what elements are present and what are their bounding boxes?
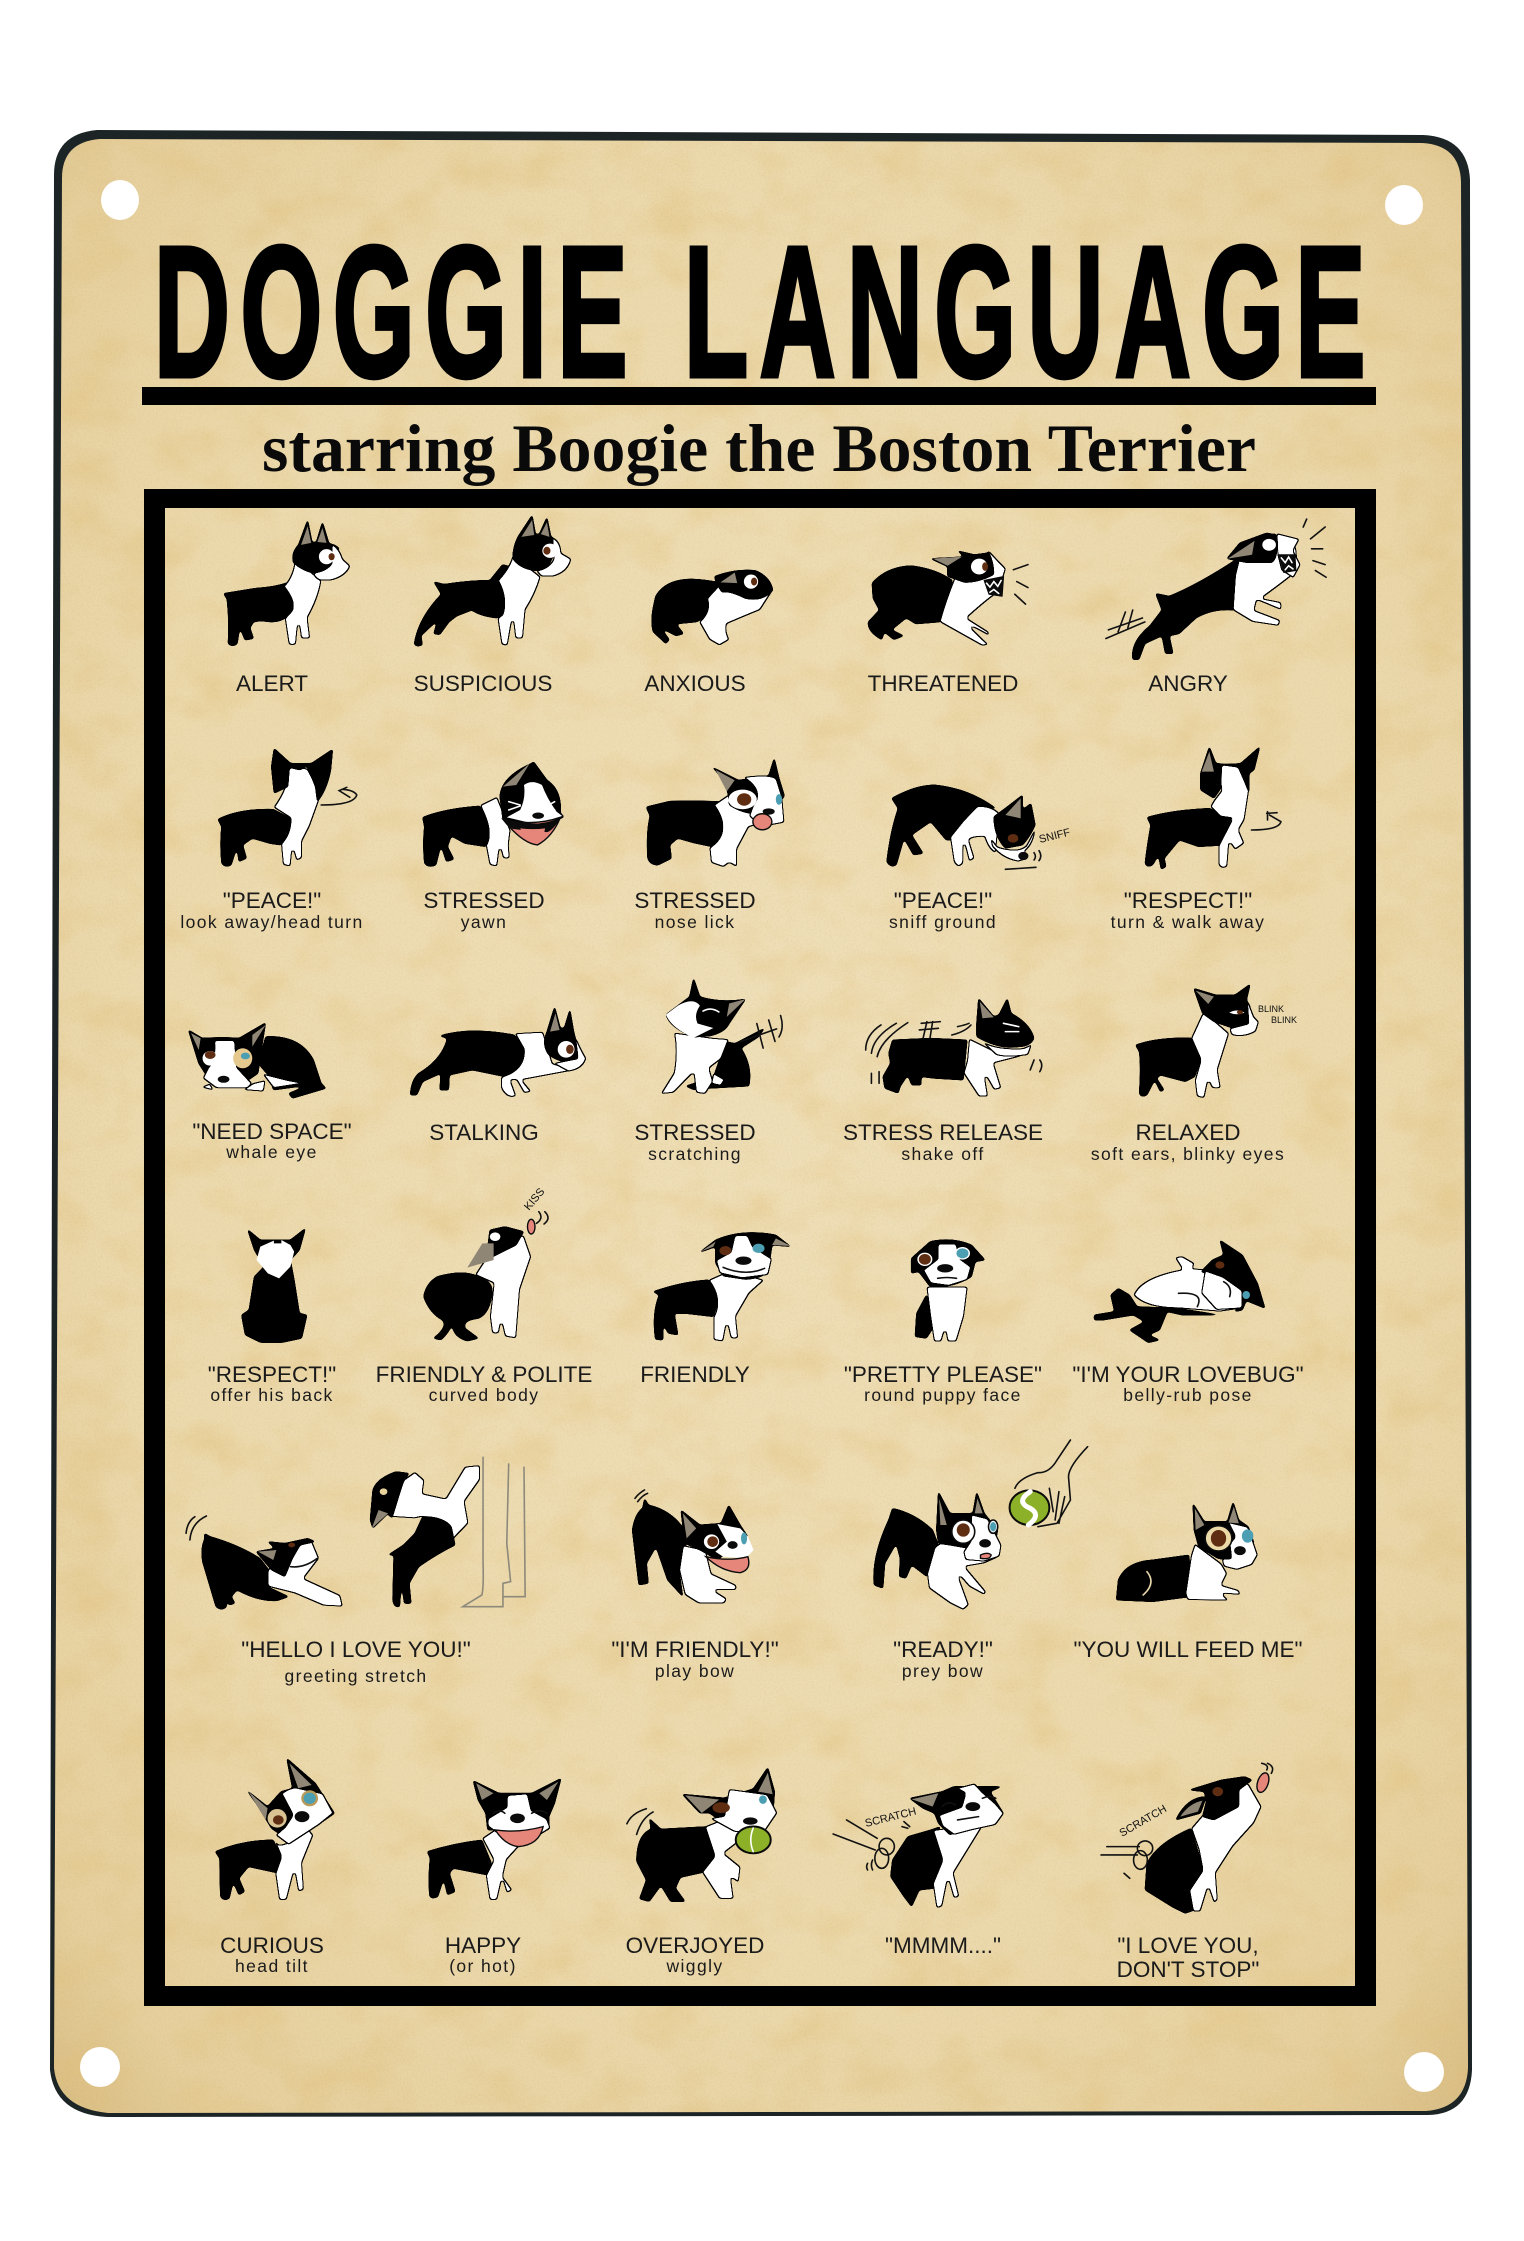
label: overjoyed: wiggly: [665, 1956, 724, 1976]
label: relaxed: [1091, 1120, 1285, 1164]
annotation: sniff: SNIFF: [1038, 827, 1072, 846]
label: stress release: STRESS RELEASE: [843, 1120, 1043, 1145]
label: stalking: STALKING: [429, 1120, 539, 1145]
label: mmmm: "MMMM....": [885, 1933, 1001, 1958]
dog: pretty please: [911, 1240, 985, 1342]
label: overjoyed: [626, 1933, 764, 1976]
label: i'm friendly: [611, 1637, 779, 1681]
label: threatened: THREATENED: [868, 671, 1018, 696]
label: need space: whale eye: [225, 1142, 318, 1162]
dog: stressed yawn: [423, 762, 564, 867]
label: stressed nose lick: STRESSED: [634, 888, 756, 913]
annotation: scratch: SCRATCH: [1118, 1803, 1169, 1840]
title: DOGGIE: [154, 209, 627, 417]
label: pretty please: "PRETTY PLEASE": [844, 1362, 1042, 1387]
dog: greeting stretch low: [186, 1516, 343, 1609]
label: curious: [220, 1933, 324, 1976]
label: pretty please: round puppy face: [864, 1385, 1022, 1405]
label: friendly and polite: FRIENDLY & POLITE: [376, 1362, 592, 1387]
dog: friendly and polite: [424, 1212, 548, 1341]
label: stress release: [843, 1120, 1043, 1164]
mounting hole bottom right: [1404, 2052, 1444, 2092]
dog: relaxed: [1135, 984, 1259, 1098]
label: happy: (or hot): [449, 1956, 517, 1976]
label: respect turn and walk away: "RESPECT!": [1124, 888, 1252, 913]
dog: greeting stretch against legs: [370, 1457, 525, 1607]
dog: suspicious: [414, 515, 571, 646]
dog: alert: [223, 520, 351, 646]
label: need space: "NEED SPACE": [192, 1119, 352, 1144]
label: i'm friendly: play bow: [655, 1661, 735, 1681]
label: need space: [192, 1119, 352, 1162]
label: curious: head tilt: [235, 1956, 309, 1976]
dog: stress release shake off: [866, 998, 1042, 1097]
subtitle: starring Boogie the Boston Terrier: [262, 410, 1256, 486]
label: respect offer back: [208, 1362, 336, 1405]
dog: mmmm scratching: [833, 1783, 1004, 1908]
dog: stalking: [410, 1007, 586, 1097]
label: hello i love you: [241, 1637, 471, 1686]
dog: i love you don't stop: [1101, 1763, 1273, 1913]
icon: hand holding tennis ball: [1010, 1440, 1088, 1527]
label: stressed yawn: yawn: [461, 912, 507, 932]
dog: respect offer back: [241, 1228, 307, 1342]
dog: peace look away: [218, 748, 357, 867]
label: alert: ALERT: [236, 671, 308, 696]
dog: stressed scratching: [660, 978, 782, 1094]
label: i'm friendly: "I'M FRIENDLY!": [611, 1637, 779, 1662]
label: respect turn and walk away: turn & walk away: [1111, 912, 1265, 932]
label: relaxed: RELAXED: [1135, 1120, 1241, 1145]
dog: lovebug belly rub: [1094, 1240, 1265, 1343]
label: respect turn and walk away: [1111, 888, 1265, 932]
label: stressed yawn: STRESSED: [423, 888, 545, 913]
label: ready: "READY!": [893, 1637, 993, 1662]
label: peace look away: [180, 888, 364, 932]
dog: friendly: [653, 1233, 791, 1342]
label: relaxed: soft ears, blinky eyes: [1091, 1144, 1285, 1164]
annotation: kiss: KISS: [522, 1186, 547, 1213]
label: happy: HAPPY: [445, 1933, 521, 1958]
label: i love you don't stop: [1117, 1933, 1259, 1982]
title: LANGUAGE: [684, 209, 1365, 417]
label: ready: prey bow: [902, 1661, 984, 1681]
dog: anxious: [652, 570, 773, 646]
mounting hole top left: [101, 180, 139, 220]
annotation: blink blink: [1258, 1004, 1297, 1025]
label: friendly and polite: [376, 1362, 592, 1405]
dog: ready prey bow: [874, 1492, 1002, 1610]
annotation: scratch: SCRATCH: [864, 1806, 918, 1830]
mounting hole bottom left: [80, 2047, 120, 2087]
label: stressed scratching: scratching: [648, 1144, 742, 1164]
dog: angry: [1106, 519, 1326, 659]
label: i love you don't stop: DON'T STOP": [1117, 1957, 1259, 1982]
label: respect offer back: "RESPECT!": [208, 1362, 336, 1387]
label: peace look away: "PEACE!": [223, 888, 321, 913]
label: hello i love you: "HELLO I LOVE YOU!": [241, 1637, 471, 1662]
dog: need space whale eye: [188, 1023, 326, 1098]
label: lovebug: [1072, 1362, 1304, 1405]
label: stressed nose lick: [634, 888, 756, 932]
label: anxious: ANXIOUS: [644, 671, 746, 696]
dog: stressed nose lick: [646, 758, 785, 867]
label: stressed yawn: [423, 888, 545, 932]
dog: respect turn and walk away: [1145, 747, 1281, 869]
label: peace sniff ground: sniff ground: [889, 912, 997, 932]
dog: peace sniff ground: [887, 785, 1041, 869]
mounting hole top right: [1385, 185, 1423, 225]
annotation: blink blink: BLINK: [1258, 1004, 1284, 1014]
dog: happy: [427, 1778, 561, 1900]
label: peace look away: look away/head turn: [180, 912, 364, 932]
label: peace sniff ground: [889, 888, 997, 932]
dog: curious head tilt: [215, 1758, 335, 1900]
label: lovebug: belly-rub pose: [1123, 1385, 1253, 1405]
dog: overjoyed wiggly with ball: [627, 1767, 778, 1902]
label: stressed scratching: STRESSED: [634, 1120, 756, 1145]
annotation: blink blink: BLINK: [1271, 1015, 1297, 1025]
label: suspicious: SUSPICIOUS: [414, 671, 552, 696]
label: curious: CURIOUS: [220, 1933, 324, 1958]
label: overjoyed: OVERJOYED: [626, 1933, 764, 1958]
title: [154, 209, 1365, 417]
label: friendly: FRIENDLY: [640, 1362, 750, 1387]
title rule: [142, 387, 1376, 405]
dog: threatened: [868, 551, 1028, 646]
label: stress release: shake off: [901, 1144, 985, 1164]
dog: you will feed me: [1116, 1502, 1258, 1602]
label: stressed scratching: [634, 1120, 756, 1164]
label: you will feed me: "YOU WILL FEED ME": [1074, 1637, 1302, 1662]
label: peace sniff ground: "PEACE!": [894, 888, 992, 913]
label: i love you don't stop: "I LOVE YOU,: [1117, 1933, 1259, 1958]
label: ready: [893, 1637, 993, 1681]
label: angry: ANGRY: [1148, 671, 1228, 696]
label: happy: [445, 1933, 521, 1976]
label: pretty please: [844, 1362, 1042, 1405]
label: hello i love you: greeting stretch: [284, 1666, 428, 1686]
dog: play bow: [632, 1490, 754, 1603]
label: stressed nose lick: nose lick: [655, 912, 735, 932]
chart frame: [144, 489, 1376, 2006]
label: friendly and polite: curved body: [429, 1385, 539, 1405]
label: respect offer back: offer his back: [210, 1385, 334, 1405]
label: lovebug: "I'M YOUR LOVEBUG": [1072, 1362, 1304, 1387]
